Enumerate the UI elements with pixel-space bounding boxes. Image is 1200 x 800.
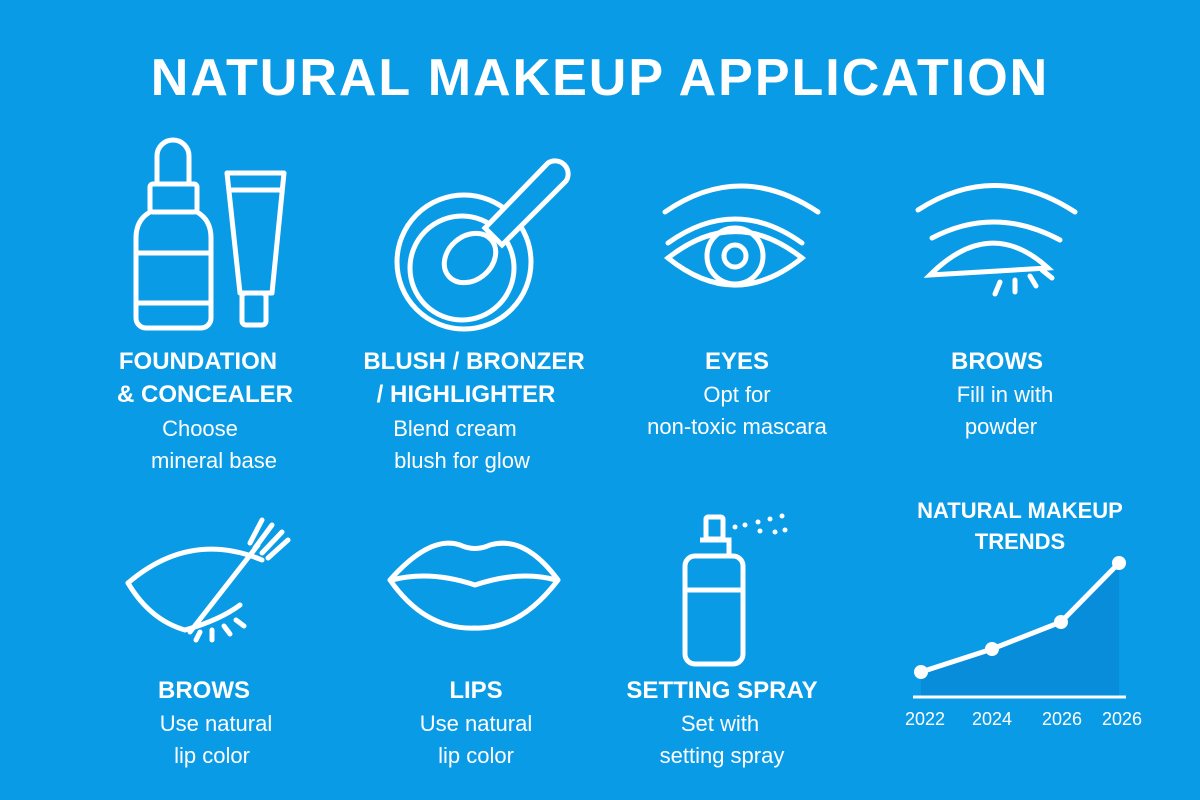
icon: eye — [665, 186, 818, 285]
text: eyes: Opt for — [703, 382, 771, 407]
text: brows: BROWS — [951, 348, 1043, 375]
text: lips: Use natural — [420, 711, 532, 736]
text: blush: / HIGHLIGHTER — [377, 381, 555, 408]
icon: brow with spoolie — [128, 520, 288, 640]
text: foundation: Choose — [162, 416, 238, 441]
icon: setting spray — [685, 514, 788, 664]
chart: natural makeup trends: 2026 — [1042, 709, 1082, 729]
text: brows — [951, 348, 1053, 439]
text: blush: Blend cream — [393, 416, 517, 441]
chart: natural makeup trends: 2026 — [1102, 709, 1142, 729]
chart: natural makeup trends: TRENDS — [975, 529, 1065, 554]
text: foundation: FOUNDATION — [119, 348, 277, 375]
text: foundation: mineral base — [151, 448, 277, 473]
text: setting spray: SETTING SPRAY — [626, 677, 818, 704]
title: NATURAL MAKEUP APPLICATION — [151, 49, 1049, 107]
text: lips: LIPS — [449, 677, 503, 704]
text: eyes: EYES — [705, 348, 769, 375]
text: foundation — [117, 348, 293, 473]
icon: brows closed eye — [918, 185, 1075, 294]
text: blush: BLUSH / BRONZER — [363, 348, 585, 375]
text: foundation: & CONCEALER — [117, 381, 293, 408]
text: lips — [420, 677, 532, 768]
text: setting spray: Set with — [681, 711, 759, 736]
text: eyes: non-toxic mascara — [647, 414, 828, 439]
text: brows: Fill in with — [957, 382, 1053, 407]
text: blush — [363, 348, 585, 473]
text: setting spray: setting spray — [660, 743, 784, 768]
chart: natural makeup trends: NATURAL MAKEUP — [917, 498, 1123, 523]
icon: blush compact and brush — [397, 161, 568, 329]
text: brows: powder — [965, 414, 1037, 439]
text: brows row2 — [158, 677, 272, 768]
text: brows row2: BROWS — [158, 677, 250, 704]
chart: natural makeup trends: 2022 — [905, 709, 945, 729]
chart: natural makeup trends — [905, 498, 1142, 729]
icon: foundation bottle and tube — [136, 140, 284, 328]
text: eyes — [647, 348, 828, 439]
text: setting spray — [626, 677, 818, 768]
text: brows row2: lip color — [174, 743, 250, 768]
icon: lips — [390, 543, 558, 628]
text: lips: lip color — [438, 743, 514, 768]
text: blush: blush for glow — [394, 448, 530, 473]
text: brows row2: Use natural — [160, 711, 272, 736]
chart: natural makeup trends: 2024 — [972, 709, 1012, 729]
